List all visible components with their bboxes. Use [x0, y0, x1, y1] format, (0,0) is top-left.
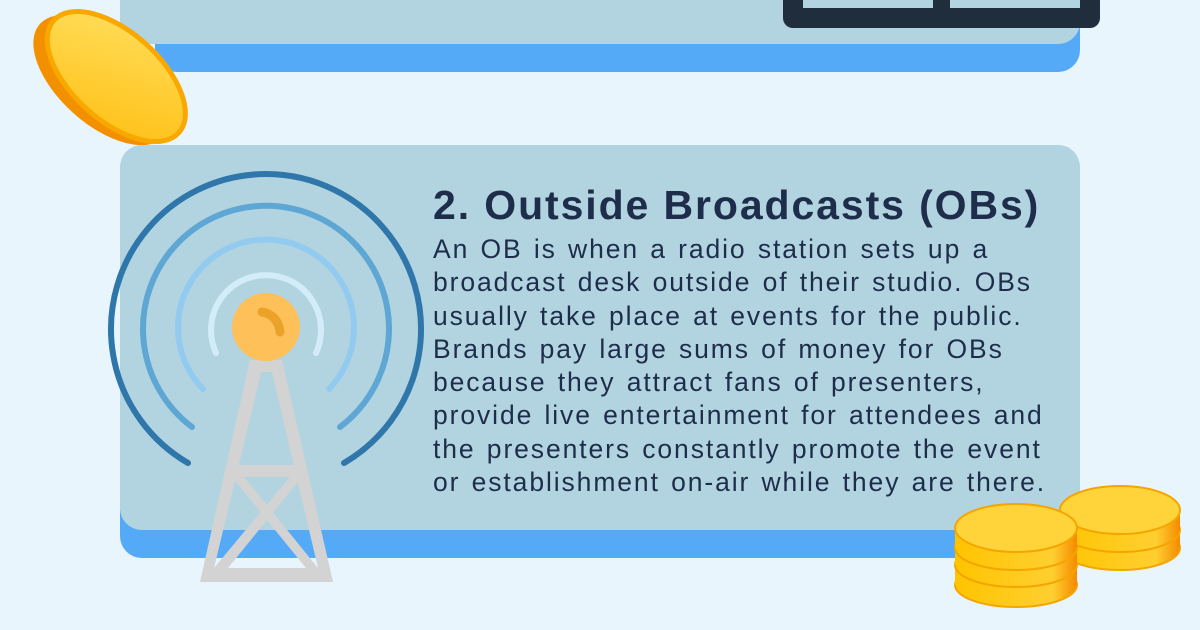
- text block: [433, 234, 1046, 497]
- icon: radio tower: [108, 171, 424, 582]
- text block: because they attract fans of presenters,: [433, 367, 984, 397]
- text block: provide live entertainment for attendees and: [433, 400, 1044, 430]
- monitor frame: [783, 0, 1100, 28]
- title: 2. Outside Broadcasts (OBs): [433, 182, 1040, 228]
- text block: usually take place at events for the public.: [433, 301, 1023, 331]
- top panel: [120, 0, 1100, 72]
- text block: broadcast desk outside of their studio. OBs: [433, 267, 1032, 297]
- text block: Brands pay large sums of money for OBs: [433, 334, 1004, 364]
- text block: An OB is when a radio station sets up a: [433, 234, 989, 264]
- icon: coin stacks: [954, 485, 1181, 608]
- text block: or establishment on-air while they are there.: [433, 467, 1046, 497]
- panel: outside broadcasts: [120, 145, 1080, 558]
- icon: gold coin top left: [33, 9, 188, 146]
- text block: the presenters constantly promote the event: [433, 434, 1042, 464]
